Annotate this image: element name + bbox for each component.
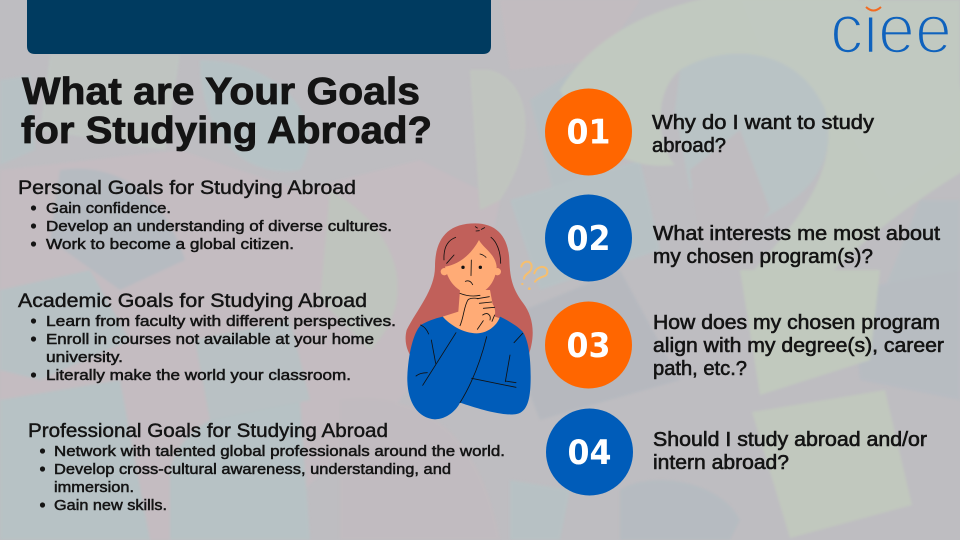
- question 01: [652, 112, 874, 157]
- question 03: align with my degree(s), career: [653, 335, 944, 357]
- face: [441, 227, 501, 296]
- item 04: [546, 408, 927, 496]
- heading: professional goals: Professional Goals for Studying Abroad: [28, 420, 388, 442]
- list: personal goals: Develop an understanding of diverse cultures.: [46, 218, 392, 235]
- list: academic goals: university.: [46, 349, 123, 366]
- title: [21, 71, 432, 152]
- list: professional goals: Gain new skills.: [54, 497, 167, 514]
- heading: academic goals: Academic Goals for Studying Abroad: [18, 290, 367, 312]
- list: personal goals: [31, 200, 392, 253]
- question 04: [653, 429, 927, 474]
- badge 01: [545, 88, 632, 176]
- question 02: [653, 223, 940, 268]
- badge 03: [545, 302, 632, 388]
- list: professional goals: [40, 443, 505, 514]
- neck and chest: [443, 290, 500, 334]
- sweater: [407, 317, 531, 419]
- question 03: path, etc.?: [653, 358, 747, 380]
- question 03: How does my chosen program: [653, 312, 940, 334]
- list: academic goals: [31, 313, 396, 384]
- title: for Studying Abroad?: [21, 110, 432, 152]
- badge 04: [546, 408, 633, 496]
- panel: professional goals: [28, 420, 505, 514]
- item 04: 04: [568, 433, 612, 473]
- hand: [460, 297, 495, 333]
- badge 02: [545, 194, 632, 282]
- item 02: [545, 194, 940, 282]
- question marks: [521, 262, 547, 282]
- question 01: Why do I want to study: [652, 112, 874, 134]
- panel: personal goals: [18, 177, 392, 253]
- question 02: my chosen program(s)?: [653, 246, 873, 268]
- list: professional goals: Network with talented global professionals around the world.: [54, 443, 505, 460]
- question 01: abroad?: [652, 135, 726, 157]
- list: academic goals: Enroll in courses not available at your home: [46, 331, 374, 348]
- list: professional goals: immersion.: [54, 479, 134, 496]
- item 01: 01: [566, 112, 610, 152]
- sweater fold lines: [416, 325, 523, 403]
- title: What are Your Goals: [22, 71, 420, 113]
- item 01: [545, 88, 874, 176]
- question 02: What interests me most about: [653, 223, 940, 245]
- panel: academic goals: [18, 290, 396, 384]
- item 03: 03: [566, 326, 610, 366]
- list: academic goals: Literally make the world your classroom.: [46, 367, 351, 384]
- item 03: [545, 302, 944, 388]
- list: personal goals: Gain confidence.: [46, 200, 171, 217]
- list: personal goals: Work to become a global citizen.: [46, 236, 294, 253]
- question 03: [653, 312, 944, 380]
- top banner: [27, 0, 491, 54]
- illustration: thinking woman: [406, 223, 547, 419]
- hair: [406, 223, 533, 360]
- question 04: Should I study abroad and/or: [653, 429, 927, 451]
- question 04: intern abroad?: [653, 452, 789, 474]
- list: academic goals: Learn from faculty with different perspectives.: [46, 313, 396, 330]
- item 02: 02: [566, 219, 610, 259]
- list: professional goals: Develop cross-cultural awareness, understanding, and: [54, 461, 451, 478]
- heading: personal goals: Personal Goals for Studying Abroad: [18, 177, 356, 199]
